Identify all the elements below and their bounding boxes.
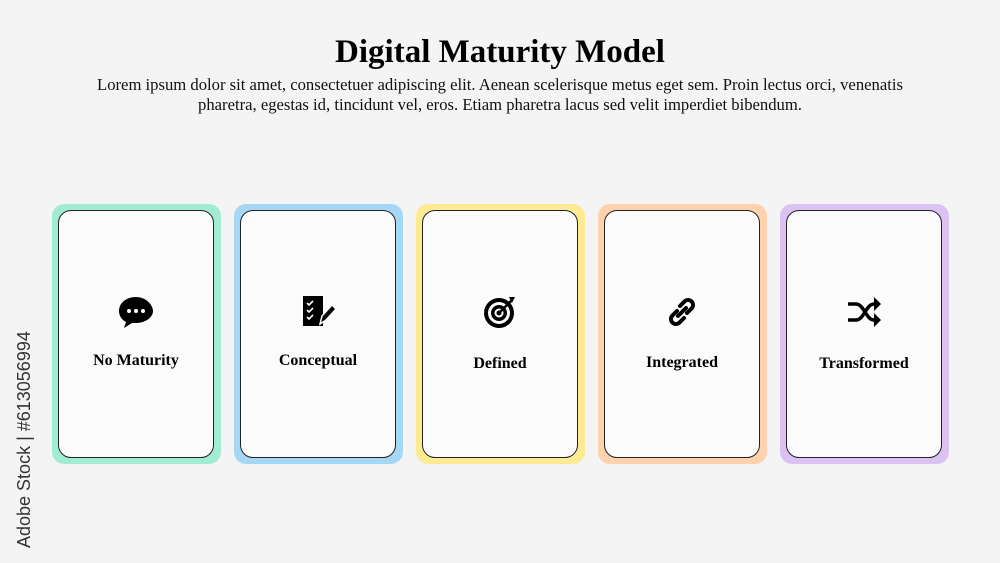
panel: defined <box>416 204 585 464</box>
title: Digital Maturity Model <box>335 34 665 70</box>
panel: integrated <box>598 204 767 464</box>
icon: speech bubble <box>119 297 153 328</box>
label: Integrated <box>646 354 718 371</box>
label: No Maturity <box>93 352 179 369</box>
label: Conceptual <box>279 352 357 369</box>
icon: shuffle arrows <box>848 297 881 327</box>
icon: target <box>484 297 515 328</box>
watermark text: Adobe Stock | #613056994 <box>14 331 34 548</box>
panel: conceptual <box>234 204 403 464</box>
icon: chain link <box>669 298 695 326</box>
description text: Lorem ipsum dolor sit amet, consectetuer adipiscing elit. Aenean scelerisque metus eget sem. Proin lectus orci, venenatis pharetra, egestas id, tincidunt vel, eros. Etiam pharetra lacus sed velit imperdiet bibendum. <box>97 75 903 114</box>
panel: transformed <box>780 204 949 464</box>
label: Defined <box>473 355 527 372</box>
label: Transformed <box>819 355 909 372</box>
panel: no maturity <box>52 204 221 464</box>
icon: checklist with pencil <box>303 296 335 326</box>
